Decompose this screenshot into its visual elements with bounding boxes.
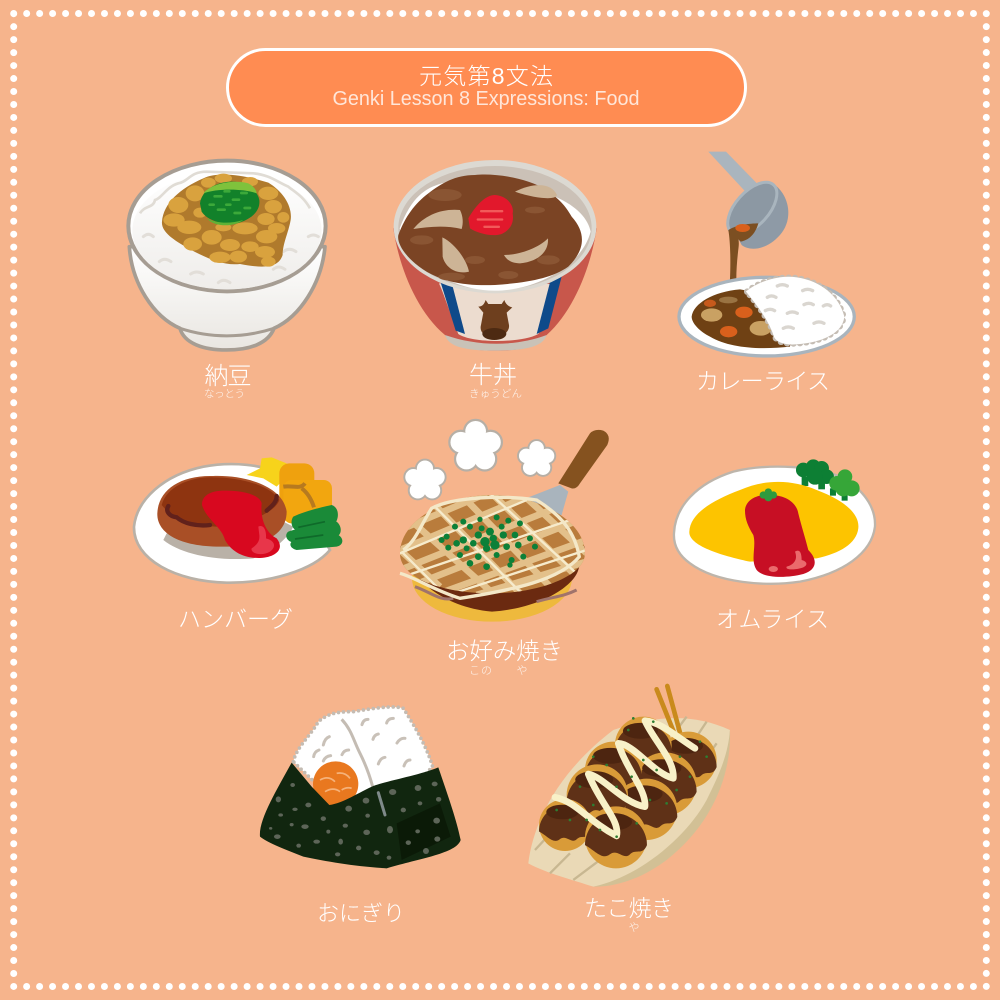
curry stream xyxy=(728,229,739,297)
aonori specks xyxy=(555,717,708,838)
katakana: カレーライス xyxy=(696,368,830,394)
title text: 元気第8文法 xyxy=(419,63,553,89)
label: gyudon xyxy=(469,362,522,400)
boat inner edge xyxy=(593,730,730,887)
parsley xyxy=(760,488,777,501)
nori xyxy=(260,763,461,868)
rice top xyxy=(128,161,326,291)
katakana: ハンバーグ xyxy=(178,606,293,632)
illustration: natto bowl xyxy=(128,161,326,350)
base pancake xyxy=(412,535,572,622)
beef xyxy=(398,174,582,285)
katakana: オムライス xyxy=(716,606,829,632)
ladle handle xyxy=(708,152,763,198)
furigana kono: この xyxy=(469,665,492,677)
ladle opening xyxy=(719,174,786,243)
furigana ya: や xyxy=(628,921,640,934)
rice edge xyxy=(293,707,433,807)
mayo outer xyxy=(400,497,579,598)
label: okonomiyaki xyxy=(446,638,563,677)
natto beans base xyxy=(162,175,291,267)
top xyxy=(400,495,585,594)
bowl white band xyxy=(439,283,555,341)
ladle bowl xyxy=(730,185,788,249)
bowl rim xyxy=(394,160,596,293)
vegetables xyxy=(701,297,772,337)
rice ridge xyxy=(140,172,310,213)
ketchup xyxy=(202,491,280,558)
hiragana: おにぎり xyxy=(317,901,405,926)
corn xyxy=(247,457,287,487)
illustration: gyudon bowl xyxy=(393,160,597,351)
onion slices xyxy=(413,185,557,272)
illustration: omurice xyxy=(674,459,875,584)
hamburg patty xyxy=(157,476,287,547)
takoyaki balls xyxy=(539,717,717,868)
blue stripes xyxy=(438,270,563,334)
kanji: 納豆 xyxy=(204,363,252,390)
chopsticks xyxy=(657,686,681,735)
charred edge xyxy=(167,496,277,525)
nori seam xyxy=(378,793,385,815)
grey mayo swirl xyxy=(415,587,577,602)
banner pill xyxy=(228,50,746,126)
natto beans xyxy=(163,174,289,267)
bowl foot xyxy=(445,335,547,351)
pumpkin xyxy=(279,463,332,523)
shadow xyxy=(163,520,293,559)
subtitle text: Genki Lesson 8 Expressions: Food xyxy=(332,88,640,110)
red pickled ginger xyxy=(468,195,513,235)
pan neck xyxy=(522,485,568,520)
kanji and kana: お好み焼き xyxy=(446,638,563,664)
ketchup xyxy=(745,495,815,577)
illustration: okonomiyaki xyxy=(397,421,609,622)
beef shading xyxy=(410,189,560,281)
label: takoyaki xyxy=(584,895,674,934)
illustration: hamburg steak xyxy=(134,457,342,583)
label: natto xyxy=(204,363,252,400)
furigana: きゅうどん xyxy=(469,388,522,400)
kanji and kana: たこ焼き xyxy=(584,895,674,921)
plate xyxy=(134,464,330,583)
plate xyxy=(679,277,854,356)
ketchup highlight xyxy=(769,551,806,572)
bowl body xyxy=(129,247,325,350)
rice grains xyxy=(314,718,410,766)
rice fill xyxy=(747,278,843,343)
curry in ladle xyxy=(729,223,758,242)
steam puff right xyxy=(519,441,554,475)
sauce layer xyxy=(400,547,585,612)
green aonori xyxy=(439,514,538,570)
steam puff centre xyxy=(450,421,501,469)
kanji: 牛丼 xyxy=(469,362,517,389)
title banner xyxy=(228,50,746,126)
illustration: onigiri xyxy=(260,707,461,868)
salmon filling xyxy=(313,761,358,807)
rice grains xyxy=(765,285,831,328)
broccoli dark xyxy=(796,459,834,489)
green onion topping xyxy=(200,182,259,225)
foot rim xyxy=(180,328,274,336)
steam puff left xyxy=(405,461,445,498)
nori darker patch xyxy=(397,803,451,860)
bowl body xyxy=(393,228,597,351)
illustration: curry rice xyxy=(679,152,854,356)
rice scallop edge xyxy=(747,278,843,343)
illustration: takoyaki xyxy=(528,686,730,887)
broccoli light xyxy=(829,469,860,501)
mayonnaise xyxy=(555,721,695,836)
cow face xyxy=(478,300,512,340)
sesame dots xyxy=(269,782,441,860)
green peppers xyxy=(286,505,342,550)
rice crease xyxy=(342,719,373,787)
omelette xyxy=(689,482,858,562)
wood grain xyxy=(535,717,717,880)
curry xyxy=(692,289,800,348)
bowl interior xyxy=(398,166,592,290)
rice grains xyxy=(143,234,318,283)
pan handle xyxy=(558,430,609,488)
plate xyxy=(674,467,875,584)
furigana ya: や xyxy=(516,664,528,677)
wooden boat xyxy=(528,718,730,887)
rice xyxy=(400,179,591,291)
furigana: なっとう xyxy=(204,388,245,400)
